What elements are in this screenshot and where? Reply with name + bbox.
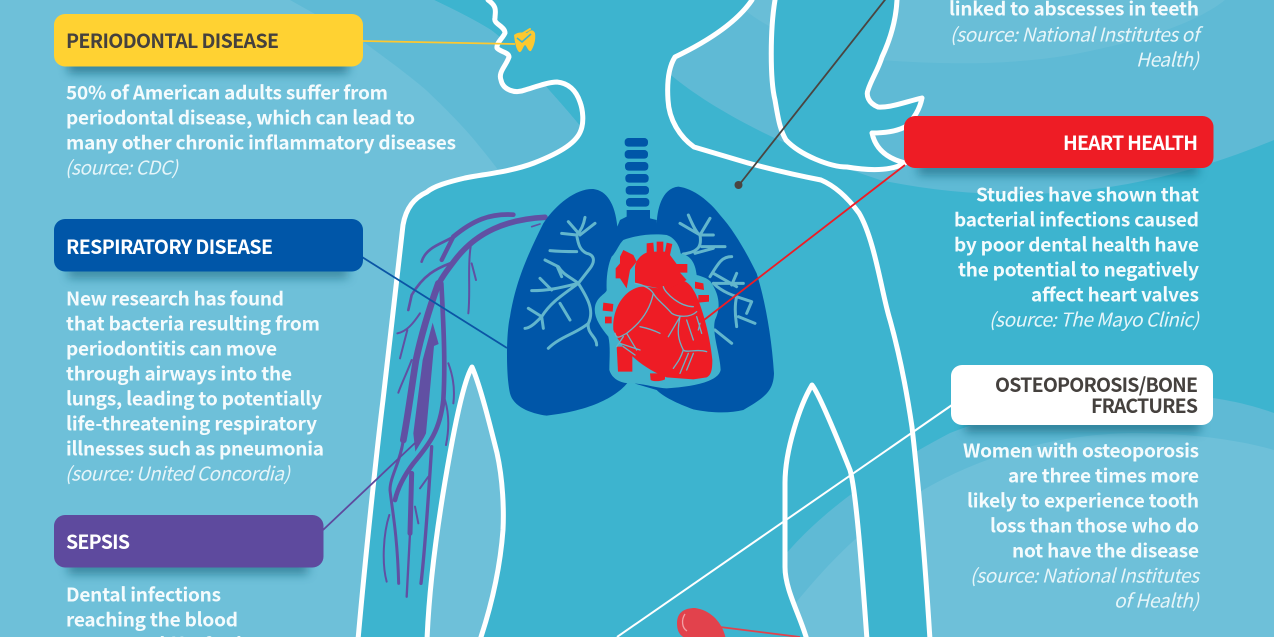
panel: osteoporosis: Women with osteoporosis	[963, 436, 1199, 463]
heart halo	[595, 234, 721, 388]
panel: sepsis: reaching the blood	[66, 605, 238, 632]
connector: sepsis	[323, 443, 415, 530]
icon: tooth	[514, 29, 535, 52]
panel: periodontal disease	[54, 14, 456, 180]
panel: abscess text: Health)	[1136, 45, 1201, 72]
panel: osteoporosis: are three times more	[1008, 461, 1199, 488]
panel: heart health: by poor dental health have	[954, 230, 1199, 257]
panel: sepsis	[54, 515, 324, 637]
panel: heart health: (source: The Mayo Clinic)	[989, 305, 1201, 332]
panel: heart health: bacterial infections caused	[954, 205, 1199, 232]
connector: respiratory	[362, 257, 507, 348]
panel: osteoporosis: of Health)	[1114, 586, 1201, 613]
connector: heart	[704, 165, 905, 320]
panel: respiratory disease: periodontitis can move	[66, 334, 277, 361]
panel: osteoporosis: FRACTURES	[1091, 390, 1198, 419]
panel: periodontal disease: PERIODONTAL DISEASE	[66, 25, 279, 54]
panel: osteoporosis: likely to experience tooth	[967, 486, 1199, 513]
lungs	[507, 138, 774, 416]
connector: abscess	[734, 0, 888, 189]
panel: periodontal disease: periodontal disease, which can lead to	[66, 103, 415, 130]
panel: osteoporosis	[951, 365, 1213, 613]
panel: osteoporosis: loss than those who do	[990, 511, 1199, 538]
panel: respiratory disease: illnesses such as pneumonia	[66, 434, 324, 461]
panel: periodontal disease: many other chronic inflammatory diseases	[66, 128, 456, 155]
body silhouette	[358, 0, 930, 637]
lung shapes	[507, 187, 774, 416]
coronary vessels	[615, 283, 707, 373]
icon: kidney	[677, 608, 726, 637]
panel: osteoporosis: (source: National Institutes	[970, 561, 1201, 588]
panel: respiratory disease: (source: United Concordia)	[65, 459, 292, 486]
trachea	[625, 138, 649, 207]
panel: heart health: HEART HEALTH	[1063, 127, 1198, 156]
panel: respiratory disease: RESPIRATORY DISEASE	[66, 231, 273, 260]
panel: osteoporosis: OSTEOPOROSIS/BONE	[995, 369, 1198, 398]
panel: abscess text: (source: National Institutes of	[950, 20, 1204, 47]
panel: respiratory disease: life-threatening respiratory	[66, 409, 317, 436]
panel: respiratory disease: New research has found	[66, 284, 284, 311]
panel: respiratory disease	[54, 219, 363, 486]
panel: osteoporosis: not have the disease	[1012, 536, 1199, 563]
panel: heart health: Studies have shown that	[976, 180, 1199, 207]
connector: osteoporosis	[617, 405, 952, 637]
panel: heart health: the potential to negatively	[958, 255, 1199, 282]
panel: respiratory disease: through airways into the	[66, 359, 292, 386]
panel: abscess text	[949, 0, 1204, 72]
panel: periodontal disease: (source: CDC)	[65, 153, 180, 180]
panel: heart health	[904, 116, 1214, 332]
heart	[603, 242, 712, 381]
panel: sepsis: SEPSIS	[66, 526, 130, 555]
panel: sepsis: Dental infections	[66, 580, 221, 607]
veins	[384, 215, 545, 597]
panel: respiratory disease: lungs, leading to potentially	[66, 384, 322, 411]
panel: respiratory disease: that bacteria resulting from	[66, 309, 320, 336]
bronchi	[525, 215, 755, 348]
connector: kidney	[720, 627, 800, 637]
connector: periodontal	[363, 41, 515, 44]
panel: heart health: affect heart valves	[1031, 280, 1199, 307]
panel: periodontal disease: 50% of American adults suffer from	[66, 78, 388, 105]
